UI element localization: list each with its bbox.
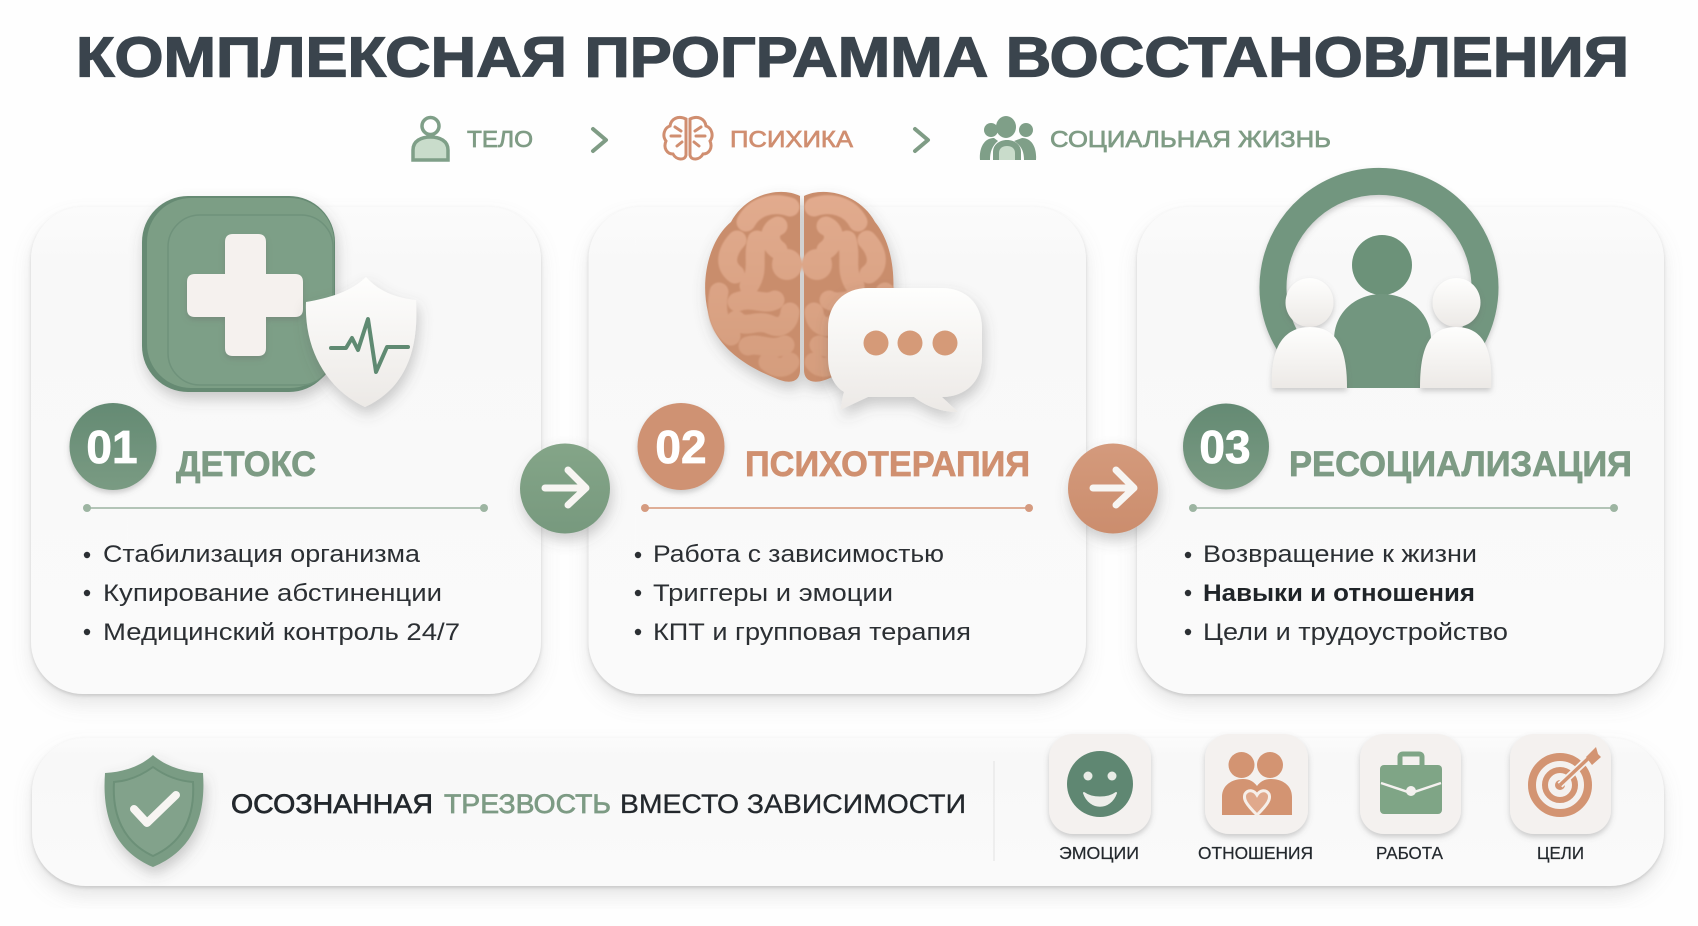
tile: relationships (1198, 734, 1313, 863)
slogan: ТРЕЗВОСТЬ (444, 789, 611, 819)
number badge 02: 02 (655, 421, 707, 473)
number badge 03 (1183, 404, 1269, 490)
divider (641, 504, 1033, 512)
panel: psychotherapy (588, 192, 1086, 694)
slogan: ОСОЗНАННАЯ (231, 789, 433, 819)
divider (1189, 504, 1618, 512)
chevron arrow (593, 129, 606, 151)
icon: shield with check (105, 755, 203, 867)
panel: resocialization (1137, 181, 1664, 694)
arrow: step 1 to 2 (520, 444, 610, 534)
slogan: ВМЕСТО ЗАВИСИМОСТИ (620, 789, 966, 819)
number badge 01 (70, 403, 156, 490)
divider (994, 761, 995, 861)
panel: bottom band (32, 734, 1664, 886)
divider (83, 504, 488, 512)
subtitle stages row (413, 116, 1331, 160)
heading: psychotherapy: ПСИХОТЕРАПИЯ (745, 445, 1030, 484)
bullet list: Купирование абстиненции (103, 580, 442, 607)
chevron arrow (915, 129, 928, 151)
bullet list: Триггеры и эмоции (653, 580, 893, 607)
icon: people in a ring (1272, 181, 1491, 388)
icon: group (980, 116, 1036, 160)
heading: detox: ДЕТОКС (176, 445, 316, 484)
bullet list: Навыки и отношения (1203, 580, 1475, 607)
tile: goals: ЦЕЛИ (1537, 843, 1584, 863)
title: КОМПЛЕКСНАЯ ПРОГРАММА ВОССТАНОВЛЕНИЯ (76, 26, 1629, 90)
label: social life: СОЦИАЛЬНАЯ ЖИЗНЬ (1050, 126, 1331, 152)
icon: brain with speech bubble (705, 192, 982, 412)
tile: relationships: ОТНОШЕНИЯ (1198, 843, 1313, 863)
bullet list: Медицинский контроль 24/7 (103, 619, 460, 646)
icon: brain outline (664, 117, 712, 159)
icon: medical cross with shield (142, 196, 416, 407)
label: psyche: ПСИХИКА (730, 126, 854, 152)
label: body: ТЕЛО (467, 126, 533, 152)
bullet list: Работа с зависимостью (653, 541, 944, 568)
bullet list (635, 541, 971, 646)
number badge 03: 03 (1199, 421, 1251, 473)
bullet list: Возвращение к жизни (1203, 541, 1477, 568)
heading: resocialization: РЕСОЦИАЛИЗАЦИЯ (1289, 445, 1632, 484)
number badge 02 (638, 403, 724, 490)
number badge 01: 01 (86, 421, 138, 473)
bullet list: Стабилизация организма (103, 541, 421, 568)
slogan (231, 789, 966, 819)
card background (31, 207, 541, 694)
arrow: step 2 to 3 (1068, 444, 1158, 534)
bullet list (84, 541, 460, 646)
tile: emotions: ЭМОЦИИ (1059, 843, 1139, 863)
tile: goals (1510, 734, 1611, 863)
card background (1137, 207, 1664, 694)
panel: detox (31, 196, 541, 694)
tile: emotions (1049, 734, 1151, 863)
bullet list: Цели и трудоустройство (1203, 619, 1508, 646)
card background (588, 207, 1086, 694)
bullet list (1185, 541, 1508, 646)
tile: work (1360, 734, 1461, 863)
icon: person (413, 118, 448, 160)
tile: work: РАБОТА (1376, 843, 1443, 863)
bullet list: КПТ и групповая терапия (653, 619, 971, 646)
band background (32, 738, 1664, 886)
